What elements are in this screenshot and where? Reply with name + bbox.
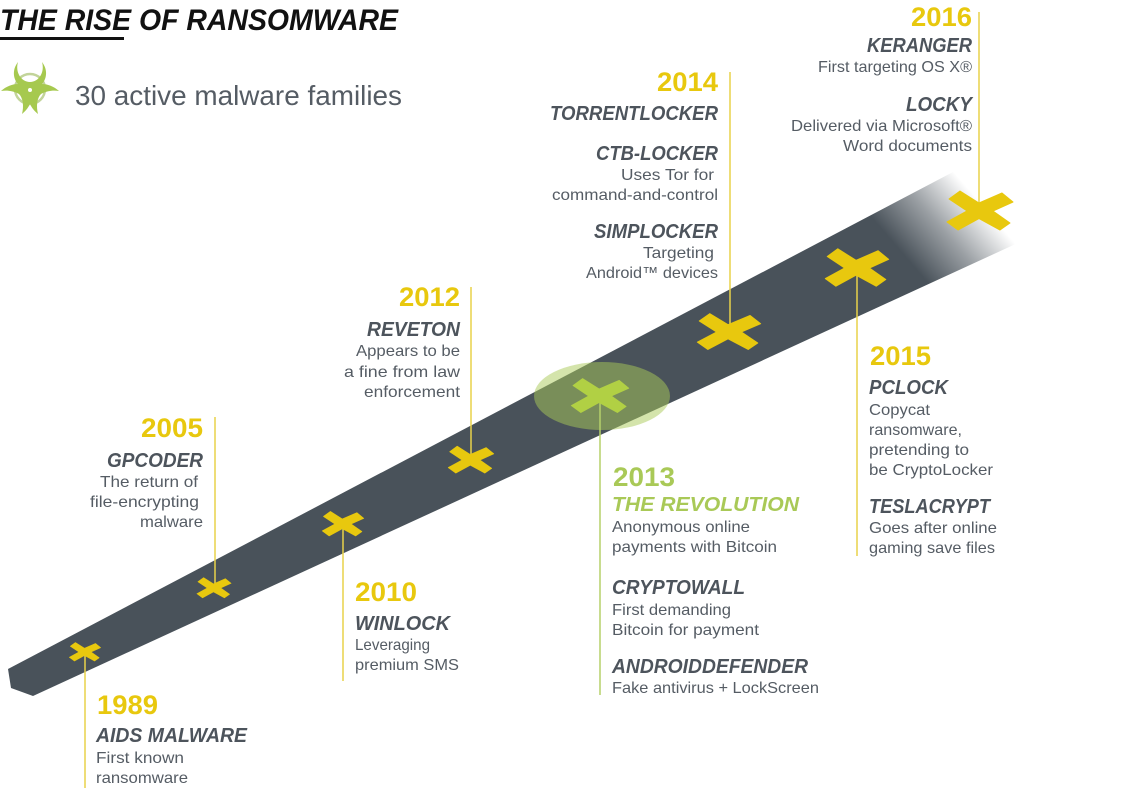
- event: 2015: Copycat: [869, 402, 931, 419]
- leader lines: [85, 12, 979, 788]
- event: 2016: LOCKY: [906, 94, 974, 116]
- event: 2013: 2013: [613, 462, 675, 492]
- event: 2012: a fine from law: [344, 364, 460, 381]
- event: 2005: 2005: [141, 413, 203, 443]
- event: 2010: 2010: [355, 577, 417, 607]
- event: 2005: [90, 413, 204, 531]
- event: 2016: Word documents: [843, 138, 972, 155]
- event: 2010: [355, 577, 459, 674]
- event: 2013: Fake antivirus + LockScreen: [612, 680, 819, 697]
- event: 1989: [95, 690, 248, 787]
- event: 2012: [344, 282, 461, 401]
- event: 2013: payments with Bitcoin: [612, 539, 777, 556]
- event: 2014: Targeting: [643, 245, 714, 262]
- event: 2016: Delivered via Microsoft®: [791, 118, 972, 135]
- timeline band: [8, 172, 1020, 696]
- event: 2013: THE REVOLUTION: [612, 494, 800, 516]
- event: 1989: ransomware: [96, 770, 188, 787]
- event: 1989: 1989: [97, 690, 158, 720]
- event: 2015: TESLACRYPT: [869, 496, 992, 518]
- event: 2014: [550, 67, 719, 282]
- title: THE RISE OF RANSOMWARE: [0, 4, 399, 37]
- event: 2014: command-and-control: [552, 187, 718, 204]
- event: 2013: CRYPTOWALL: [612, 577, 745, 599]
- event: 2013: Anonymous online: [612, 519, 750, 536]
- event: 2005: The return of: [100, 474, 199, 491]
- event: 2015: be CryptoLocker: [869, 462, 994, 479]
- event: 2010: WINLOCK: [355, 613, 452, 635]
- event: 2013: ANDROIDDEFENDER: [611, 656, 809, 678]
- event: 2010: premium SMS: [355, 657, 459, 674]
- event: 2014: Android™ devices: [586, 265, 718, 282]
- event: 2015: gaming save files: [869, 540, 995, 557]
- event: 2014: Uses Tor for: [621, 167, 715, 184]
- event: 2014: TORRENTLOCKER: [550, 103, 719, 125]
- event: 2012: Appears to be: [356, 343, 460, 360]
- event: 2014: SIMPLOCKER: [594, 221, 719, 243]
- event: 2015: 2015: [870, 341, 931, 371]
- event: 2016: [791, 2, 974, 155]
- event: 2013: First demanding: [612, 602, 731, 619]
- event: 2013: Bitcoin for payment: [612, 622, 760, 639]
- event: 1989: First known: [96, 750, 184, 767]
- event: 2013: [611, 462, 819, 697]
- event: 2010: Leveraging: [355, 637, 430, 654]
- event: 2016: First targeting OS X®: [818, 59, 972, 76]
- highlight: 2013 ellipse: [534, 362, 670, 430]
- event: 2015: ransomware,: [869, 422, 962, 439]
- event: 2012: REVETON: [367, 319, 461, 341]
- event: 2014: CTB-LOCKER: [596, 143, 719, 165]
- event: 2015: [869, 341, 997, 557]
- event: 2015: PCLOCK: [869, 377, 949, 399]
- malware family count: 30 active malware families: [75, 80, 402, 111]
- event: 1989: AIDS MALWARE: [95, 725, 248, 747]
- event: 2016: 2016: [911, 2, 972, 32]
- event: 2015: Goes after online: [869, 520, 997, 537]
- icon: biohazard: [1, 62, 59, 114]
- timeline crosses: [69, 191, 1013, 661]
- event: 2014: 2014: [657, 67, 718, 97]
- event: 2016: KERANGER: [867, 35, 973, 57]
- event: 2015: pretending to: [869, 442, 969, 459]
- event: 2005: malware: [140, 514, 203, 531]
- event: 2012: 2012: [399, 282, 460, 312]
- event: 2005: file-encrypting: [90, 494, 199, 511]
- event: 2005: GPCODER: [107, 450, 204, 472]
- event: 2012: enforcement: [364, 384, 461, 401]
